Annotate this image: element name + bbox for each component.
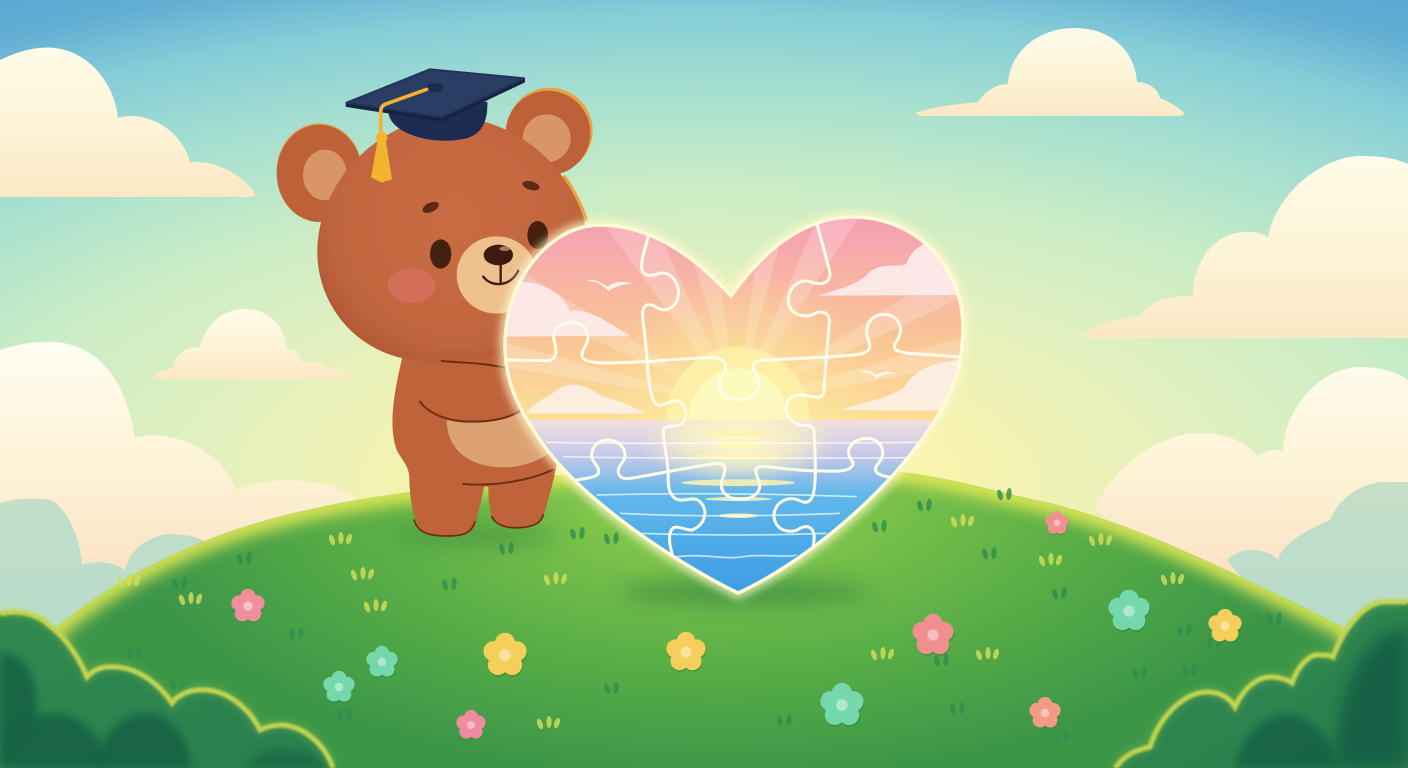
bear: foot outlines xyxy=(414,515,543,536)
heart: cloud lower right xyxy=(841,360,963,411)
heart: sea wave lines xyxy=(547,442,923,558)
bear xyxy=(277,69,593,536)
flower: pink large xyxy=(912,614,954,656)
heart: sunset sky xyxy=(506,218,962,420)
heart: birds xyxy=(586,280,897,378)
heart: sun reflection xyxy=(652,415,826,518)
bear: eyes xyxy=(430,221,548,269)
bush: bottom left xyxy=(0,612,333,768)
heart: yellow ray glow xyxy=(650,292,828,404)
cloud: large lower right xyxy=(1095,367,1408,640)
flower: yellow right xyxy=(1208,609,1242,643)
cloud: pale blue lower left xyxy=(0,498,215,640)
heart: glow xyxy=(505,217,963,593)
cloud: top right xyxy=(915,28,1185,116)
heart: sea xyxy=(529,420,933,591)
heart: cloud upper right xyxy=(818,242,963,296)
bear: belly xyxy=(447,413,548,467)
bear: muzzle xyxy=(457,236,537,314)
cap: tassel xyxy=(371,132,392,183)
flower: coral right xyxy=(1029,697,1061,729)
bear: head with orange rim xyxy=(317,116,586,362)
heart: sun xyxy=(667,346,810,420)
bear: eyebrows xyxy=(421,179,540,215)
bush: bottom right xyxy=(1115,602,1408,768)
bear: mouth xyxy=(483,264,518,284)
cloud: small left xyxy=(152,309,358,379)
flower: green small xyxy=(366,646,398,678)
cap: cord xyxy=(381,89,427,135)
bear: nose xyxy=(484,245,513,265)
flower: yellow xyxy=(483,633,527,677)
flower: green large xyxy=(820,683,864,727)
flower: pink far xyxy=(1045,511,1069,535)
flower: yellow centre xyxy=(666,632,706,672)
flower: green xyxy=(323,671,355,703)
grass tufts xyxy=(116,488,1282,743)
flower: pink small xyxy=(456,710,486,740)
cap: button xyxy=(426,83,444,92)
bear: body xyxy=(392,353,557,536)
cloud: top left xyxy=(0,48,255,197)
cloud: right middle xyxy=(1082,156,1408,338)
heart: cloud lower left xyxy=(527,385,644,414)
puzzle heart xyxy=(506,218,962,591)
cloud: large lower left xyxy=(0,342,354,640)
heart: sun rays xyxy=(506,218,961,394)
flower: pink left xyxy=(231,589,265,623)
cloud: pale blue lower right xyxy=(1227,482,1408,650)
heart: outline xyxy=(505,217,963,593)
flower: green right xyxy=(1108,590,1150,632)
flowers xyxy=(231,511,1242,740)
ground shadows xyxy=(390,521,870,606)
bear: left ear xyxy=(277,123,362,222)
bear: cheek xyxy=(388,268,436,303)
bear: right ear xyxy=(506,88,593,175)
heart: puzzle seams xyxy=(507,225,960,560)
bear: leg line xyxy=(463,470,553,485)
graduation cap xyxy=(347,69,524,183)
hill xyxy=(56,472,1346,768)
bear: arm xyxy=(410,361,531,422)
heart: pale band of clouds left xyxy=(503,282,630,337)
